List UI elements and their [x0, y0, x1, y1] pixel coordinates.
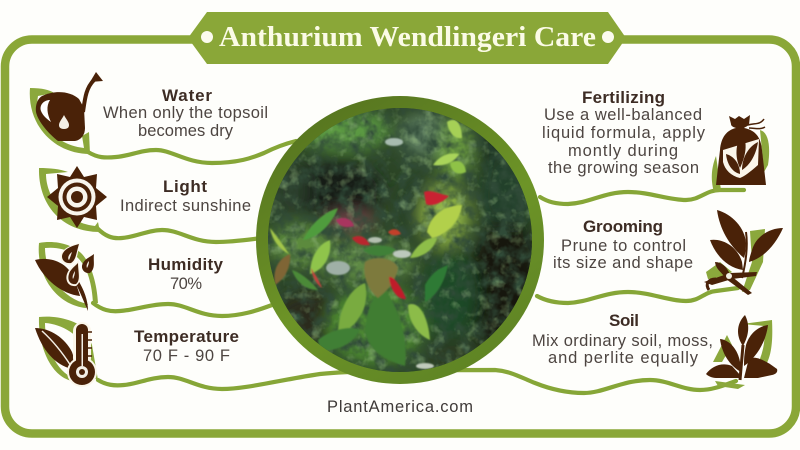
text: soil advice: Mix ordinary soil, moss,	[532, 332, 713, 350]
wavy connector: light	[97, 228, 262, 242]
item: temperature	[35, 317, 239, 387]
text: soil advice: and perlite equally	[548, 349, 699, 367]
heading: Water: Water	[162, 86, 212, 105]
text: temperature range: 70 F - 90 F	[143, 347, 230, 365]
icon: watering can on leaf	[30, 72, 103, 154]
text: humidity value: 70%	[170, 275, 202, 293]
item: soil	[532, 311, 777, 389]
text: water advice: becomes dry	[138, 122, 234, 140]
text: water advice	[103, 104, 268, 140]
heading: Temperature: Temperature	[134, 327, 239, 346]
text: fertilizing advice: the growing season	[548, 159, 699, 177]
heading: Grooming: Grooming	[583, 217, 663, 236]
text: grooming advice: Prune to control	[561, 237, 686, 255]
heading: Light: Light	[163, 177, 207, 196]
website credit: PlantAmerica.com	[327, 398, 473, 416]
text: light advice: Indirect sunshine	[120, 197, 251, 215]
icon: fertilizer sack	[712, 115, 769, 192]
heading: Humidity: Humidity	[148, 255, 224, 274]
item: grooming	[553, 210, 783, 295]
wavy connector: temperature and soil	[98, 370, 736, 393]
heading: Soil: Soil	[609, 311, 639, 330]
red anthurium flowers	[424, 191, 449, 205]
item: fertilizing	[542, 88, 769, 192]
wavy connector: fertilizing	[540, 190, 744, 204]
icon: leaves with droplets	[35, 242, 98, 311]
text: fertilizing advice: liquid formula, apply	[542, 124, 706, 142]
icon: leaf with thermometer	[35, 317, 98, 387]
text: fertilizing advice	[542, 106, 706, 177]
item: water	[30, 72, 268, 154]
photo of anthurium jungle in round frame	[256, 96, 544, 384]
icon: sun on leaf	[39, 166, 107, 232]
text: soil advice	[532, 332, 713, 367]
pale sky and pale foliage	[385, 138, 403, 146]
item: light	[39, 166, 251, 232]
item: humidity	[35, 242, 224, 311]
text: grooming advice: its size and shape	[553, 254, 693, 272]
icon: pruning shears and leaves	[704, 210, 783, 295]
sunlit leaves	[447, 120, 462, 138]
text: water advice: When only the topsoil	[103, 104, 268, 122]
text: grooming advice	[553, 237, 693, 272]
wavy connector: humidity	[93, 303, 272, 316]
text: fertilizing advice: montly during	[568, 142, 678, 160]
wavy connector: water	[88, 141, 296, 163]
title: Anthurium Wendlingeri Care	[219, 22, 596, 53]
heading: Fertilizing: Fertilizing	[582, 88, 665, 107]
icon: seedling in soil	[706, 315, 777, 389]
title banner	[188, 12, 626, 64]
wavy connector: grooming	[537, 288, 738, 303]
text: fertilizing advice: Use a well-balanced	[544, 106, 702, 124]
